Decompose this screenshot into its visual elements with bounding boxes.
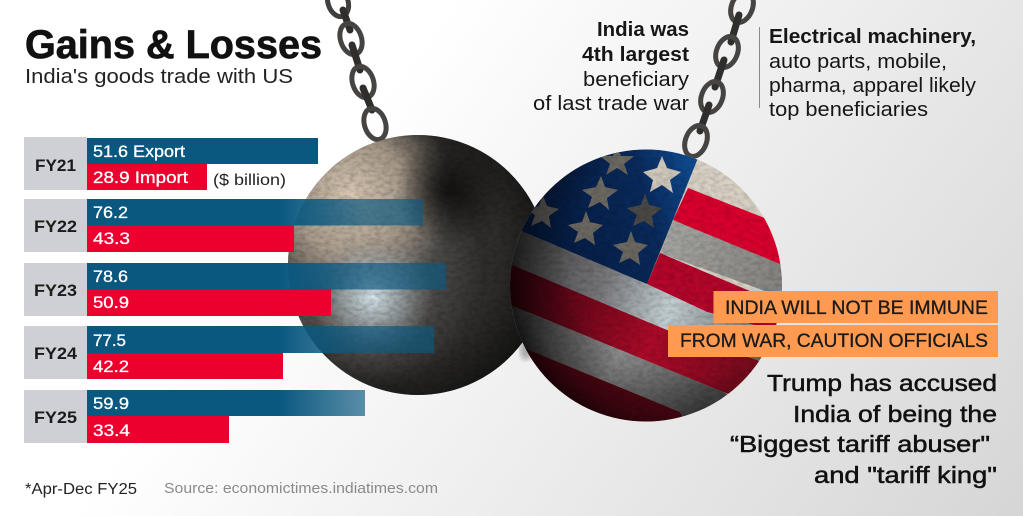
bar chart: FY23: FY23 <box>34 282 77 300</box>
bar chart: FY22: 43.3 <box>93 230 130 248</box>
text block: India was 4th largest beneficiary: of last trade war <box>533 93 689 115</box>
source: Source: economictimes.indiatimes.com <box>164 480 438 497</box>
bar chart: FY21: 28.9 Import <box>93 169 188 187</box>
callout: orange headline: INDIA WILL NOT BE IMMUNE <box>725 297 988 319</box>
bar chart: FY24: 77.5 <box>93 332 126 350</box>
bar chart: FY21: FY21 <box>35 157 76 175</box>
text block: India was 4th largest beneficiary: 4th largest <box>582 44 689 66</box>
callout: orange headline: FROM WAR, CAUTION OFFICIALS <box>680 330 988 352</box>
text block: Trump quote: India of being the <box>793 401 997 427</box>
callout: orange headline <box>668 291 998 357</box>
bar chart: FY22 <box>24 199 423 252</box>
text block: India was 4th largest beneficiary <box>533 19 689 115</box>
bar chart: FY24: 42.2 <box>93 358 129 376</box>
text block: Trump quote: and "tariff king" <box>814 462 997 488</box>
unit note: ($ billion) <box>213 172 286 189</box>
text block: top beneficiaries <box>759 26 976 121</box>
text block: top beneficiaries: pharma, apparel likely <box>769 75 976 97</box>
bar chart: FY24 <box>24 326 434 379</box>
bar chart: FY23: 50.9 <box>93 294 129 312</box>
bar chart: FY21: 51.6 Export <box>93 143 185 161</box>
bar chart: FY24: FY24 <box>34 345 78 363</box>
bar chart: FY21 <box>24 137 318 190</box>
text block: top beneficiaries: auto parts, mobile, <box>769 51 947 73</box>
bar chart: FY25 <box>24 390 365 443</box>
icon: contact shadow <box>520 340 532 360</box>
bar chart: FY23 <box>24 263 446 316</box>
bar chart: FY25: 33.4 <box>93 422 130 440</box>
bar chart: FY25: 59.9 <box>93 395 129 413</box>
footnote: *Apr-Dec FY25 <box>25 481 137 498</box>
bar chart: FY22: 76.2 <box>93 204 128 222</box>
icon: right chain <box>680 0 758 160</box>
text block: top beneficiaries: top beneficiaries <box>769 99 928 121</box>
text block: Trump quote: Trump has accused <box>767 370 997 396</box>
icon: US flag wrecking ball <box>510 150 782 422</box>
text block: India was 4th largest beneficiary: India was <box>597 19 689 41</box>
title: Gains & Losses <box>25 23 322 67</box>
bar chart: FY22: FY22 <box>34 218 77 236</box>
icon: steel wrecking ball <box>288 135 534 395</box>
subtitle: India's goods trade with US <box>25 65 293 88</box>
text block: India was 4th largest beneficiary: beneficiary <box>583 69 689 91</box>
text block: Trump quote <box>730 370 997 488</box>
text block: top beneficiaries: Electrical machinery, <box>769 26 976 48</box>
text block: Trump quote: “Biggest tariff abuser" <box>730 431 990 457</box>
icon: left chain <box>324 0 390 142</box>
bar chart: FY25: FY25 <box>34 409 77 427</box>
bar chart: FY23: 78.6 <box>93 268 128 286</box>
